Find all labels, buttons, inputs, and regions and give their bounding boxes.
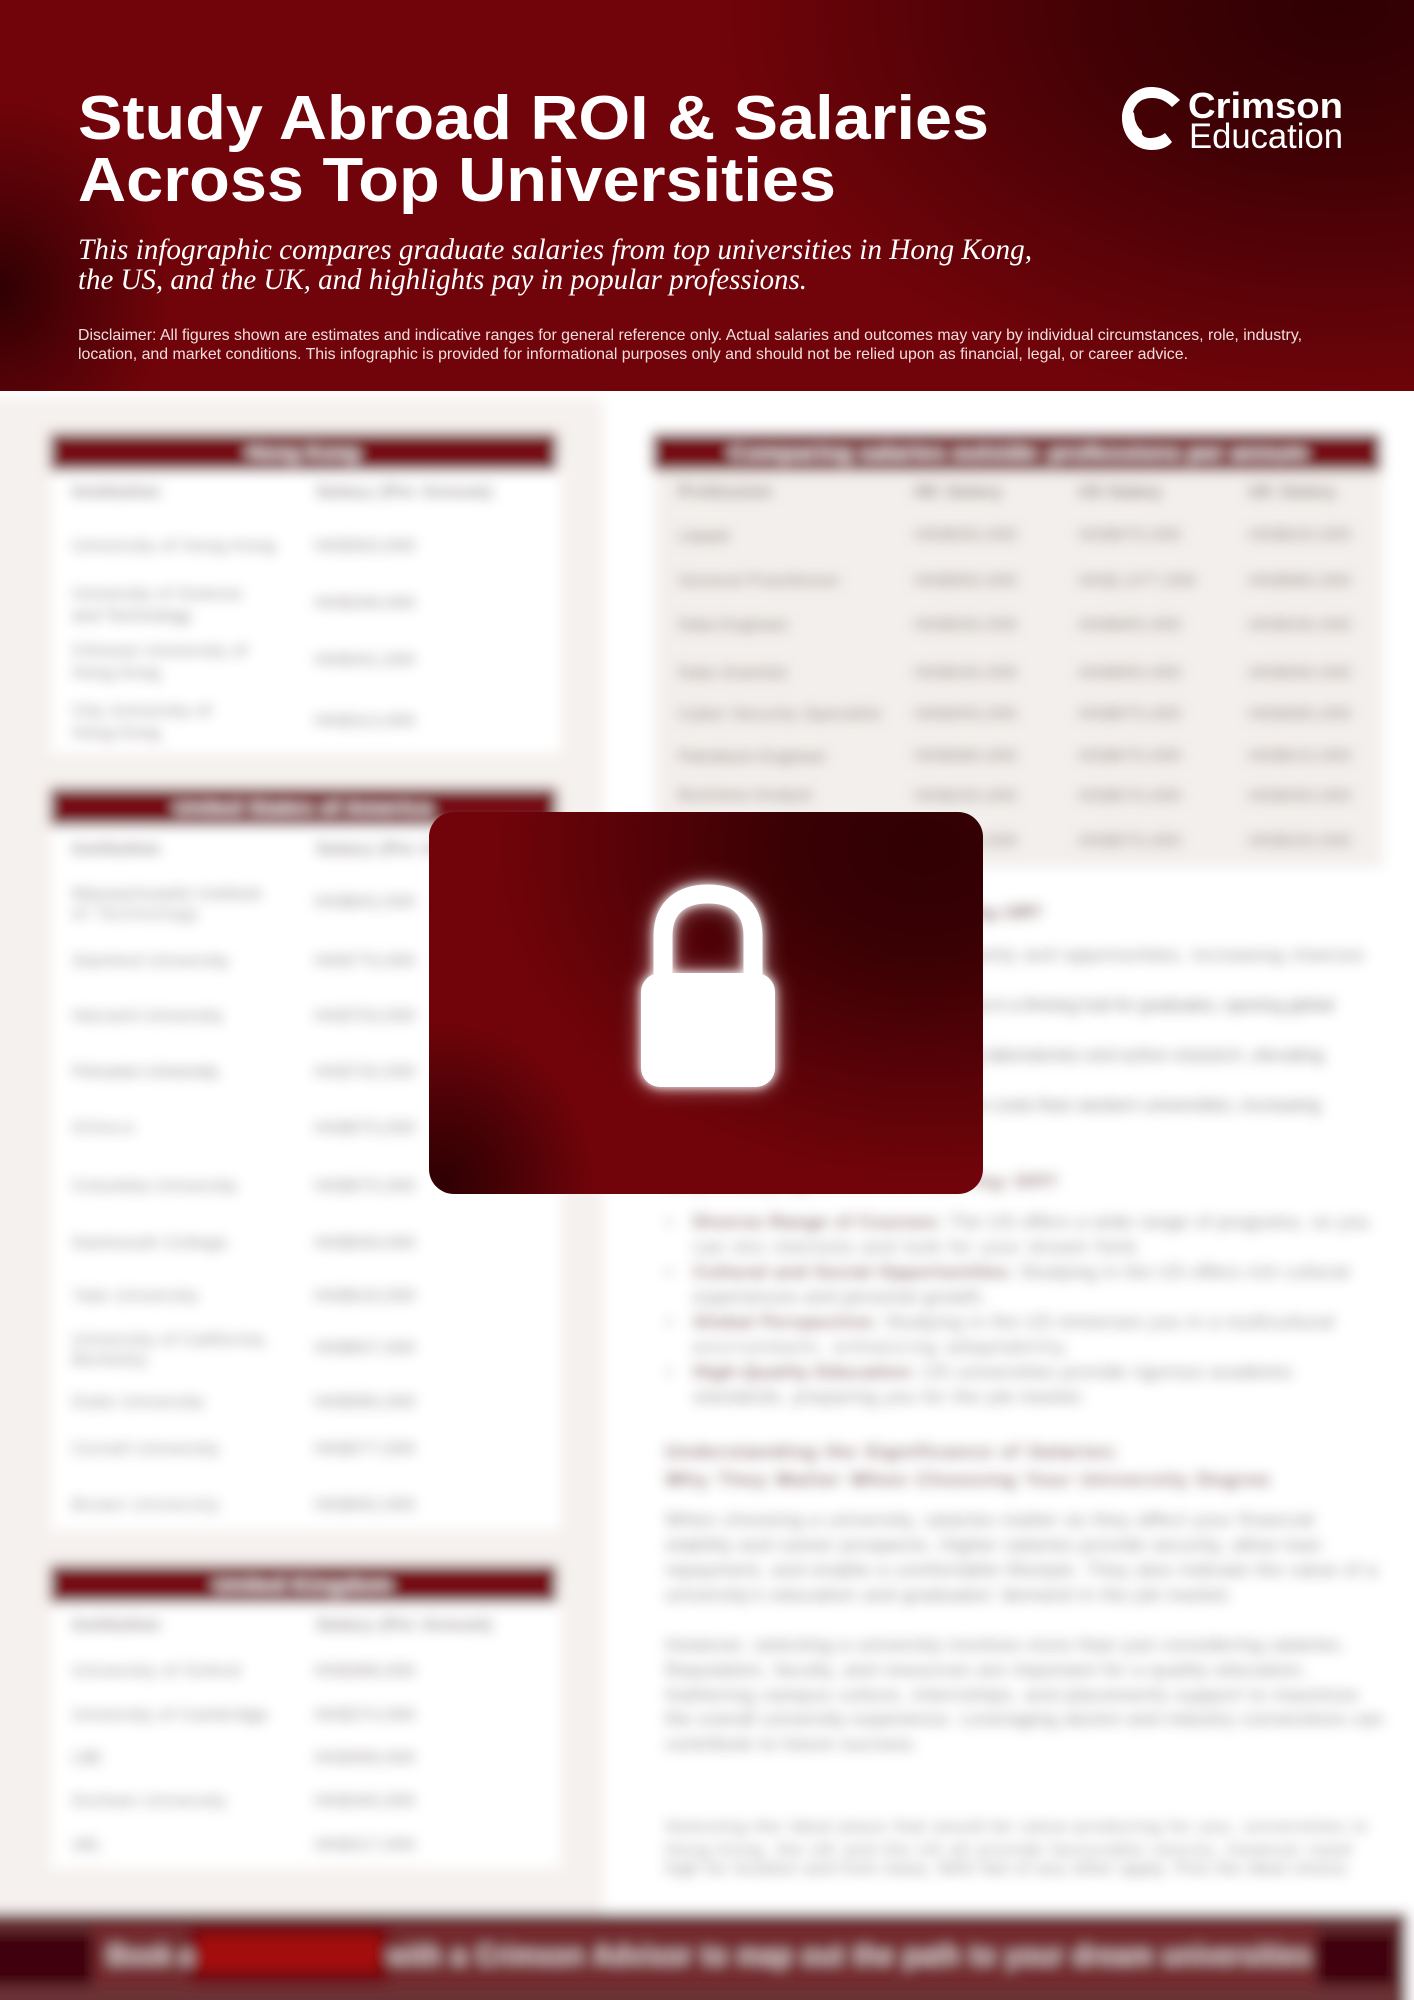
text block: closing paragraph: high for location and from many. With Net of any other apply. Pick the ideal choice. <box>665 1859 1351 1878</box>
panel: Hong Kong table: City University of <box>72 701 211 720</box>
panel: professions salary comparison table: HK$500,000 <box>914 525 1017 544</box>
panel: United States table: HK$675,000 <box>314 1118 415 1137</box>
panel: United States table: HK$585,000 <box>314 1392 415 1411</box>
text block: why the US pays off: standards, preparing you for the job market. <box>693 1387 1086 1407</box>
logo wordmark: Crimson <box>1188 85 1343 126</box>
panel: professions salary comparison table: Software Engineer <box>678 831 818 850</box>
text block: why Hong Kong pays off: Proximity to Home: Close to family and opportunities, increasing chances <box>693 945 1364 965</box>
text block: why Hong Kong pays off: of a smooth return. <box>693 968 933 988</box>
panel: United Kingdom table: HK$388,000 <box>314 1661 415 1680</box>
panel: United States table <box>50 788 561 1530</box>
panel: United States table: HK$562,000 <box>314 1495 415 1514</box>
text block: why Hong Kong pays off: Research Focus: Access to leading laboratories and active research, elevating <box>693 1045 1324 1065</box>
text block: why Hong Kong pays off: Lower Costs: Lower living and tuition costs than western universities, increasing <box>693 1095 1321 1115</box>
panel: Hong Kong table: HK$314,000 <box>314 711 415 730</box>
panel: professions salary comparison table: HK$480,000 <box>914 746 1017 765</box>
heading: understanding the significance of salaries <box>665 1442 1270 1491</box>
panel: Hong Kong table: University of Science <box>72 584 242 603</box>
disclaimer: location, and market conditions. This infographic is provided for informational purposes only and should not be relied upon as financial, legal, or career advice. <box>78 346 1188 363</box>
panel: United Kingdom table: Institution <box>72 1615 160 1634</box>
panel: United States table: University of California, <box>72 1330 268 1349</box>
panel: United States table: HK$675,000 <box>314 1176 415 1195</box>
text block: why the US pays off: Global Perspective: Studying in the US immerses you in a multicultural <box>693 1312 1334 1332</box>
panel: United States table: HK$775,000 <box>314 951 415 970</box>
disclaimer: Disclaimer: All figures shown are estimates and indicative ranges for general reference only. Actual salaries and outcomes may vary by individual circumstances, role, industry, <box>78 327 1302 344</box>
disclaimer <box>78 327 1302 363</box>
panel: United Kingdom table: UCL <box>72 1835 102 1854</box>
text block: why the US pays off: experiences and personal growth. <box>693 1287 987 1307</box>
panel: United States table: HK$616,000 <box>314 1286 415 1305</box>
panel: United Kingdom table: LSE <box>72 1748 102 1767</box>
panel: United States table: HK$842,000 <box>314 892 415 911</box>
text block: why Hong Kong pays off: your academic profile. <box>693 1068 933 1088</box>
panel: professions salary comparison table: HK$420,000 <box>914 786 1017 805</box>
text block: salaries paragraph two: Reputation, faculty, and resources are important for a quality education. <box>665 1659 1307 1680</box>
panel: professions salary comparison table: Profession <box>678 482 772 501</box>
panel: professions salary comparison table: HK$480,000 <box>1248 704 1351 723</box>
panel: United States table: Salary (Per Annum) <box>316 839 492 858</box>
text block: salaries paragraph two: the overall university experience. Leveraging alumni and industry connections can <box>665 1708 1383 1729</box>
panel: professions salary comparison table: HK$450,000 <box>914 704 1017 723</box>
text block: salaries paragraph one: university's education and graduates' demand in the job market. <box>665 1584 1233 1605</box>
text block: salaries paragraph one: stability and career prospects. Higher salaries provide security, allow loan <box>665 1534 1321 1555</box>
panel: United States table: Yale University <box>72 1286 198 1305</box>
panel: United States table: HK$577,000 <box>314 1439 415 1458</box>
panel: United Kingdom table: HK$340,000 <box>314 1791 415 1810</box>
heading: understanding the significance of salaries: Understanding the Significance of Salaries: <box>665 1442 1119 1463</box>
title: Across Top Universities <box>78 146 836 215</box>
text block: why the US pays off: Cultural and Social Opportunities: Studying in the US offers rich cultural <box>693 1262 1349 1282</box>
panel: professions salary comparison table: HK Salary <box>914 482 1003 501</box>
panel: United States table: Dartmouth College <box>72 1233 227 1252</box>
panel: United Kingdom table: HK$374,000 <box>314 1705 415 1724</box>
heading: comparing salaries across professions: Comparing salaries outside: professions per annum <box>729 442 1307 465</box>
panel: professions salary comparison table: Petroleum Engineer <box>678 747 827 766</box>
panel: professions salary comparison table: HK$530,000 <box>1248 615 1351 634</box>
panel: professions salary comparison table: HK$950,000 <box>1078 663 1181 682</box>
panel: professions salary comparison table <box>652 433 1383 867</box>
panel: professions salary comparison table: HK$970,000 <box>1078 831 1181 850</box>
logo wordmark: Education <box>1189 117 1343 156</box>
panel: United States table: Princeton University <box>72 1062 220 1081</box>
panel: United States table: of Technology <box>72 904 198 923</box>
panel: professions salary comparison table: Data Engineer <box>678 615 789 634</box>
panel: Hong Kong table: HK$348,000 <box>314 593 415 612</box>
panel: professions salary comparison table: HK$610,000 <box>1248 746 1351 765</box>
panel: United States table: Massachusetts Institute <box>72 884 262 903</box>
text block: why the US pays off: Diverse Range of Courses: The US offers a wide range of programs, so you <box>693 1212 1369 1232</box>
panel: professions salary comparison table: HK$970,000 <box>1078 525 1181 544</box>
panel: United States table: Brown University <box>72 1495 220 1514</box>
panel: United Kingdom table: HK$369,000 <box>314 1748 415 1767</box>
text block: why Hong Kong pays off: Why Studying in Hong Kong Can Pay Off? <box>665 903 1043 924</box>
panel: Hong Kong table <box>50 433 561 753</box>
panel: United Kingdom table: University of Cambridge <box>72 1705 268 1724</box>
header banner <box>0 0 1414 391</box>
text block: why the US pays off: Why Studying in the US Can Pay Off? <box>665 1172 1058 1193</box>
footer banner <box>0 1913 1407 2000</box>
panel: professions salary comparison table: General Practitioner <box>678 571 840 590</box>
panel: United States table: HK$607,000 <box>314 1338 415 1357</box>
panel: professions salary comparison table: HK$1,677,000 <box>1078 571 1196 590</box>
heading: Hong Kong: Hong Kong <box>247 442 359 465</box>
left column background <box>0 398 603 1928</box>
panel: professions salary comparison table: HK$620,000 <box>1248 525 1351 544</box>
panel: professions salary comparison table: UK Salary <box>1248 482 1337 501</box>
panel: Hong Kong table: University of Hong Kong <box>72 536 275 555</box>
panel: professions salary comparison table: HK$905,000 <box>1078 615 1181 634</box>
panel: Hong Kong table: and Technology <box>72 606 192 625</box>
panel: professions salary comparison table: HK$500,000 <box>914 615 1017 634</box>
text block: salaries paragraph two: Gathering campus culture, internships, and placements support to maximize <box>665 1684 1358 1705</box>
logo mark <box>1122 87 1180 150</box>
title <box>78 84 989 215</box>
text block: why Hong Kong pays off: Asian Network: Build links across Asia in a thriving hub for graduates, opening global <box>693 995 1334 1015</box>
text block: why the US pays off: environment, enhancing adaptability. <box>693 1337 1070 1357</box>
panel: United Kingdom table <box>50 1565 561 1868</box>
panel: United States table: Berkeley <box>72 1350 148 1369</box>
text block: closing paragraph: Selecting the Ideal place that would be value-producing for you, universities in <box>665 1817 1367 1836</box>
panel: Hong Kong table: Chinese University of <box>72 641 247 660</box>
panel: professions salary comparison table: HK$460,000 <box>914 831 1017 850</box>
subtitle <box>78 233 1032 296</box>
panel: professions salary comparison table: Lawyer <box>678 526 731 545</box>
panel: United States table: Cornell University <box>72 1439 220 1458</box>
panel: professions salary comparison table: HK$875,000 <box>1078 704 1181 723</box>
panel: Hong Kong table: HK$363,000 <box>314 536 415 555</box>
footer banner: with a Crimson Advisor to map out the path to your dream universities <box>387 1940 1310 1970</box>
footer banner: free consultation <box>198 1940 380 1970</box>
panel: professions salary comparison table: HK$540,000 <box>914 663 1017 682</box>
panel: United States table: Stanford University <box>72 951 230 970</box>
panel: United States table: Institution <box>72 839 160 858</box>
panel: United Kingdom table: University of Oxford <box>72 1661 240 1680</box>
subtitle: This infographic compares graduate salaries from top universities in Hong Kong, <box>78 233 1032 266</box>
panel: professions salary comparison table: HK$560,000 <box>1248 663 1351 682</box>
subtitle: the US, and the UK, and highlights pay in popular professions. <box>78 263 807 296</box>
panel: professions salary comparison table: Cyber Security Specialist <box>678 704 881 723</box>
panel: United States table: Columbia University <box>72 1176 238 1195</box>
panel: United States table: HK$639,000 <box>314 1233 415 1252</box>
panel: professions salary comparison table: Data Scientist <box>678 663 787 682</box>
text block: salaries paragraph two: contribute to future success. <box>665 1733 918 1754</box>
text block: why Hong Kong pays off <box>665 903 1364 1138</box>
text block: why Hong Kong pays off: career opportunities. <box>693 1018 933 1038</box>
text block: why the US pays off: High-Quality Education: US universities provide rigorous academic <box>693 1362 1293 1382</box>
panel: Hong Kong table: Salary (Per Annum) <box>316 482 492 501</box>
text block: salaries paragraph one <box>665 1509 1378 1605</box>
text block: closing paragraph: Hong Kong, the UK and the US all provide favourable returns, however need <box>665 1840 1351 1859</box>
logo wordmark <box>1188 85 1343 156</box>
heading: United States of America <box>50 788 557 826</box>
heading: United States of America: United States of America <box>174 797 432 820</box>
title: Study Abroad ROI & Salaries <box>78 84 989 153</box>
locked content card <box>429 812 983 1194</box>
text block: closing paragraph <box>665 1817 1367 1878</box>
panel: professions salary comparison table: HK$670,000 <box>1078 786 1181 805</box>
panel: Hong Kong table: HK$341,000 <box>314 650 415 669</box>
panel: professions salary comparison table: Business Analyst <box>678 785 812 804</box>
panel: professions salary comparison table: HK$520,000 <box>1248 831 1351 850</box>
panel: Hong Kong table: Hong Kong <box>72 723 160 742</box>
heading: United Kingdom: United Kingdom <box>214 1574 392 1597</box>
panel: United States table: Duke University <box>72 1392 204 1411</box>
text block: why the US pays off: can mix interests and look for your dream field. <box>693 1237 1141 1257</box>
text block: salaries paragraph two <box>665 1634 1383 1754</box>
heading: Hong Kong <box>50 433 557 471</box>
panel: United States table: HK$753,000 <box>314 1006 415 1025</box>
panel: professions salary comparison table: HK$450,000 <box>1248 786 1351 805</box>
text block: salaries paragraph one: When choosing a university, salaries matter as they affect your financial <box>665 1509 1314 1530</box>
text block: salaries paragraph two: However, selecting a university involves more than just considering salaries. <box>665 1634 1345 1655</box>
panel: professions salary comparison table: HK$970,000 <box>1078 746 1181 765</box>
panel: professions salary comparison table: US Salary <box>1078 482 1163 501</box>
text block: why the US pays off <box>665 1172 1369 1407</box>
panel: United Kingdom table: Durham University <box>72 1791 226 1810</box>
text block: salaries paragraph one: repayment, and enable a comfortable lifestyle. They also indicate the value of a <box>665 1559 1378 1580</box>
panel: professions salary comparison table: HK$950,000 <box>914 571 1017 590</box>
panel: United States table: Harvard University <box>72 1006 224 1025</box>
panel: professions salary comparison table: HK$980,000 <box>1248 571 1351 590</box>
heading: comparing salaries across professions <box>652 433 1381 471</box>
panel: United Kingdom table: Salary (Per Annum) <box>316 1615 492 1634</box>
logo: Crimson Education <box>1122 85 1343 156</box>
highlight: free consultation <box>190 1925 388 1983</box>
panel: Hong Kong table: Institution <box>72 482 160 501</box>
panel: United States table: Others <box>72 1118 134 1137</box>
panel: Hong Kong table: Hong Kong <box>72 663 160 682</box>
text block: why Hong Kong pays off: overall return. <box>693 1118 933 1138</box>
panel: United Kingdom table: HK$317,000 <box>314 1835 415 1854</box>
heading: United Kingdom <box>50 1565 557 1603</box>
icon: padlock <box>641 894 775 1087</box>
panel: United States table: HK$732,000 <box>314 1062 415 1081</box>
footer banner: Book a <box>108 1940 194 1970</box>
heading: understanding the significance of salaries: Why They Matter When Choosing Your University Degree <box>665 1470 1270 1491</box>
